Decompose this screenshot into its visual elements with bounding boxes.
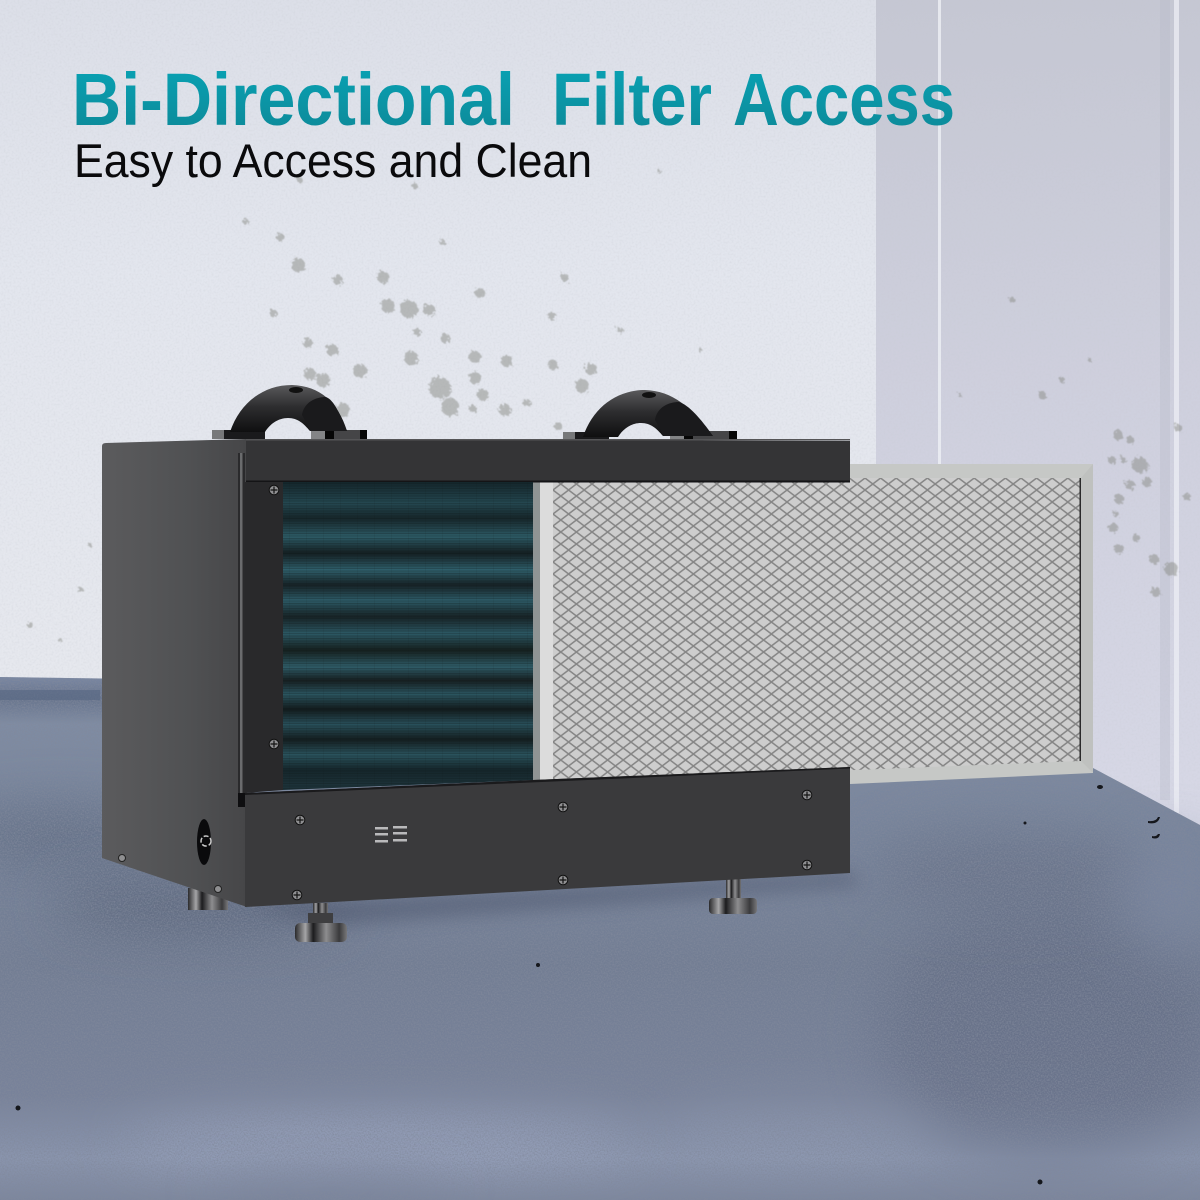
back wall bbox=[0, 0, 880, 690]
unit shadow bbox=[250, 872, 860, 925]
handle: right bbox=[563, 390, 737, 440]
filter frame bbox=[850, 464, 1093, 784]
pulled-out filter bbox=[533, 464, 1093, 784]
title bbox=[72, 58, 955, 141]
concrete floor bbox=[0, 677, 1200, 1200]
title: Filter bbox=[552, 58, 712, 141]
screws bbox=[118, 485, 812, 900]
power port bbox=[197, 819, 211, 865]
title: Bi-Directional bbox=[72, 58, 515, 141]
side wall bbox=[876, 0, 1200, 830]
condenser coil bbox=[283, 482, 533, 790]
top panel bbox=[246, 439, 850, 482]
adjustable foot: rear bbox=[709, 870, 757, 914]
bottom panel bbox=[245, 767, 850, 907]
subtitle: Easy to Access and Clean bbox=[74, 134, 592, 187]
mold specks bbox=[27, 170, 1191, 642]
filter mesh bbox=[553, 478, 1081, 782]
vent slots bbox=[375, 826, 407, 842]
adjustable foot: back corner bbox=[188, 888, 228, 910]
dehumidifier body bbox=[102, 439, 850, 907]
side panel bbox=[102, 439, 247, 907]
left post bbox=[245, 482, 283, 793]
title: Access bbox=[733, 58, 955, 141]
adjustable foot: front bbox=[295, 903, 347, 942]
handle: left bbox=[212, 385, 367, 439]
